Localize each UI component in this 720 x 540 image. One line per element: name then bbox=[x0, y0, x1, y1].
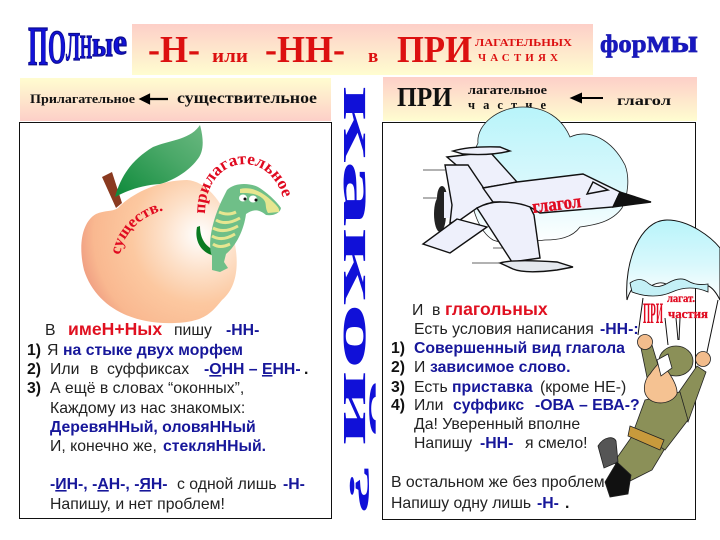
text block: adjectives rule bbox=[27, 319, 308, 513]
icon: jet nose bbox=[613, 192, 651, 207]
icon: near tail fin bbox=[445, 165, 493, 223]
wordart: полные: О bbox=[48, 21, 66, 74]
wordart: полные: Л bbox=[66, 24, 80, 69]
icon: lower stabilizer bbox=[423, 219, 487, 253]
wordart: какой? bbox=[334, 85, 385, 517]
line: напишу нн: я смело! bbox=[525, 435, 588, 452]
line: напишу н: -Н- bbox=[537, 495, 559, 512]
line: 3: 3) bbox=[391, 379, 405, 396]
arrow bbox=[141, 95, 168, 103]
line: 2: суффиксах bbox=[107, 361, 189, 378]
curved label: прилагательное: прилагательное bbox=[197, 156, 290, 214]
illustration: apple with worm bbox=[81, 125, 290, 324]
icon: soldier hands bbox=[638, 334, 652, 350]
curved label: существ.: существ. bbox=[113, 206, 162, 254]
subheader: adjective from noun bbox=[20, 78, 331, 121]
line: 1: на стыке двух морфем bbox=[63, 342, 243, 359]
heading: частиях: ЧАСТИЯХ bbox=[478, 52, 558, 64]
label: глагол on jet: глагол bbox=[531, 191, 583, 218]
subheader: participle from verb bbox=[383, 77, 697, 121]
heading: ПРИ: ПРИ bbox=[397, 29, 472, 71]
label: существительное: существительное bbox=[177, 90, 317, 107]
label: лагательное: лагательное bbox=[468, 83, 548, 97]
heading: лагательных: ЛАГАТЕЛЬНЫХ bbox=[475, 37, 572, 49]
icon: jet bbox=[423, 147, 651, 272]
heading: -НН-: -НН- bbox=[265, 29, 345, 71]
line: и в глагольных: И bbox=[412, 302, 423, 319]
heading: -Н-: -Н- bbox=[148, 29, 200, 71]
line: в именных пишу -НН-: В bbox=[45, 322, 56, 339]
line: 1: Совершенный вид глагола bbox=[414, 340, 625, 357]
label: прилагательное: Прилагательное bbox=[30, 92, 136, 106]
icon: soldier face bbox=[644, 362, 677, 403]
line: 2: -ОНН – ЕНН- bbox=[204, 361, 301, 378]
line: в именных пишу -НН-: пишу bbox=[174, 322, 212, 339]
text block: participles rule bbox=[391, 299, 640, 512]
icon: soldier helmet bbox=[659, 346, 693, 376]
line: напишу н: Напишу одну лишь bbox=[391, 495, 531, 512]
line: в остальном: В остальном же без проблем bbox=[391, 474, 605, 491]
icon: far tail fin bbox=[447, 152, 517, 188]
line: в именных пишу -НН-: -НН- bbox=[226, 322, 259, 339]
line: 3: А ещё в словах “оконных”, bbox=[50, 380, 244, 397]
icon: soldier arms bbox=[641, 345, 664, 392]
line: каждому: Каждому из нас знакомых: bbox=[50, 400, 245, 417]
line: стеклянный: стекляННый. bbox=[163, 438, 266, 455]
line: напишу нн: -НН- bbox=[480, 435, 513, 452]
line: 1: Я bbox=[47, 342, 58, 359]
line: 4: 4) bbox=[391, 397, 405, 414]
label: лагат. on parachute: лагат. bbox=[667, 291, 695, 305]
line: 4: Или bbox=[414, 397, 443, 414]
icon: peach bbox=[81, 180, 237, 323]
line: 3: 3) bbox=[27, 380, 41, 397]
icon: worm bbox=[196, 184, 281, 272]
mark: question: ? bbox=[343, 462, 374, 517]
illustration: paratrooper bbox=[598, 220, 720, 497]
line: 2: Или bbox=[50, 361, 79, 378]
line: 2: зависимое слово. bbox=[430, 359, 570, 376]
line: 2: . bbox=[304, 361, 308, 378]
wordart: полные bbox=[28, 16, 127, 78]
line: 2: в bbox=[90, 361, 98, 378]
icon: soldier torso bbox=[634, 392, 688, 450]
label: глагол: глагол bbox=[617, 94, 671, 109]
icon: soldier legs bbox=[614, 425, 670, 482]
icon: parachute lines bbox=[638, 298, 718, 352]
line: 3: приставка bbox=[452, 379, 533, 396]
line: деревянный: ДеревяННый, оловяННый bbox=[50, 419, 256, 436]
line: 2: 2) bbox=[27, 361, 41, 378]
icon: fuselage bbox=[483, 174, 620, 213]
word: какой: какой bbox=[334, 85, 385, 447]
panel: participles bbox=[382, 122, 696, 520]
line: 4: суффикс bbox=[453, 397, 524, 414]
wordart: формы: формы bbox=[600, 24, 698, 60]
line: в именных пишу -НН-: имеН+Ных bbox=[68, 319, 162, 339]
icon: cockpit bbox=[587, 182, 608, 194]
wordart: полные: ы bbox=[92, 24, 113, 64]
line: напишу нн: Напишу bbox=[414, 435, 472, 452]
line: условия: -НН-: bbox=[600, 321, 639, 338]
label: ПРИ: ПРИ bbox=[397, 82, 452, 112]
icon: soldier boots bbox=[598, 438, 618, 468]
icon: cloud bbox=[470, 107, 628, 243]
icon: soldier belt bbox=[628, 426, 664, 450]
icon: parachute canopy bbox=[627, 220, 720, 300]
icon: main wing bbox=[477, 202, 540, 262]
label: частия on parachute: частия bbox=[668, 306, 708, 321]
label: частие: частие bbox=[468, 98, 546, 112]
icon: stem bbox=[102, 172, 122, 208]
line: ин ан ян: -ИН-, -АН-, -ЯН- bbox=[50, 476, 168, 493]
heading: или: или bbox=[212, 46, 248, 67]
wordart: полные: П bbox=[28, 16, 48, 78]
header banner bbox=[132, 24, 593, 75]
icon: leaf bbox=[115, 125, 203, 197]
line: стеклянный: И, конечно же, bbox=[50, 438, 157, 455]
line: ин ан ян: -Н- bbox=[283, 476, 305, 493]
icon: speed lines bbox=[423, 170, 510, 263]
line: и в глагольных: в bbox=[432, 302, 440, 319]
line: да: Да! Уверенный вполне bbox=[414, 416, 580, 433]
line: напишу н: . bbox=[565, 495, 569, 512]
line: 4: -ОВА – ЕВА-? bbox=[535, 397, 640, 414]
line: 3: Есть bbox=[414, 379, 448, 396]
line: 2: 2) bbox=[391, 359, 405, 376]
line: и в глагольных: глагольных bbox=[445, 299, 548, 319]
line: 3: (кроме НЕ-) bbox=[540, 379, 626, 396]
icon: parachute fold bbox=[630, 279, 708, 296]
line: 1: 1) bbox=[391, 340, 405, 357]
icon: wing tank bbox=[500, 261, 573, 272]
line: ин ан ян: с одной лишь bbox=[177, 476, 277, 493]
line: напишу: Напишу, и нет проблем! bbox=[50, 496, 225, 513]
panel: adjectives bbox=[20, 122, 332, 518]
heading: в: в bbox=[368, 46, 378, 67]
icon: soldier bbox=[598, 334, 710, 497]
arrow bbox=[572, 94, 603, 102]
icon: worm eyes bbox=[239, 194, 258, 202]
icon: engine exhaust bbox=[434, 186, 452, 232]
line: 1: 1) bbox=[27, 342, 41, 359]
wordart: полные: Н bbox=[80, 29, 92, 66]
line: условия: Есть условия написания bbox=[414, 321, 594, 338]
illustration: paratrooper: ПРИ bbox=[643, 297, 663, 330]
wordart: полные: е bbox=[113, 22, 127, 62]
illustration: cloud and jet bbox=[423, 107, 651, 272]
line: 2: И bbox=[414, 359, 425, 376]
